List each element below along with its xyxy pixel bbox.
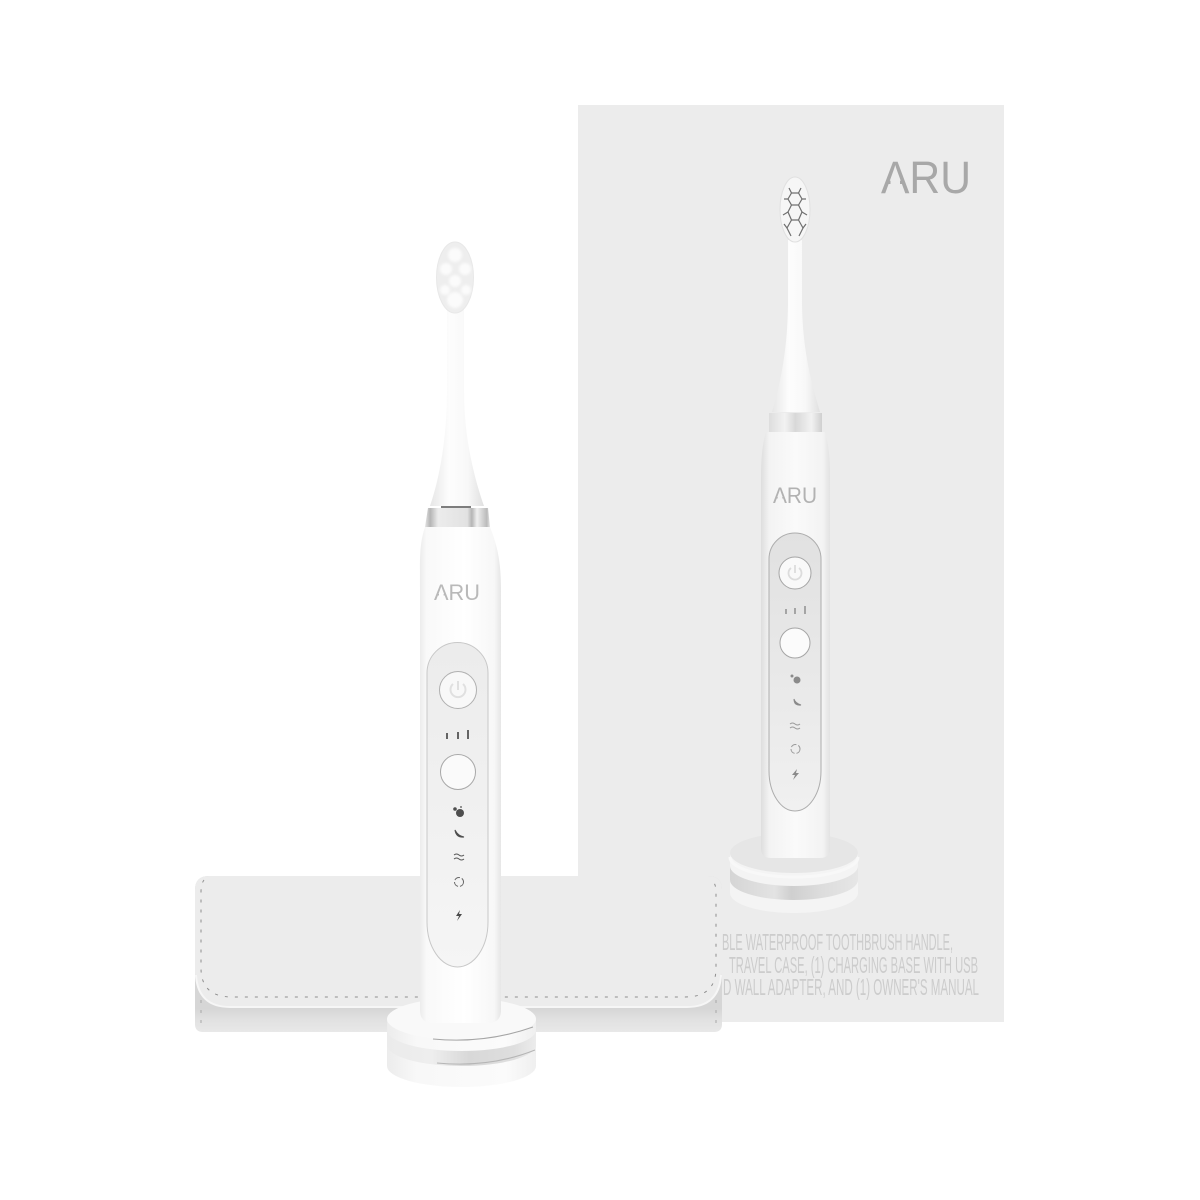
box collar xyxy=(769,413,822,432)
metal collar xyxy=(425,506,490,527)
box contents text xyxy=(722,929,979,1000)
brush neck xyxy=(430,305,484,506)
box base xyxy=(730,833,858,913)
power button xyxy=(440,672,476,708)
icon: leaf xyxy=(455,830,464,837)
battery indicator xyxy=(447,730,468,739)
charging base xyxy=(387,998,536,1087)
mode button xyxy=(440,754,476,790)
box logo: ARU xyxy=(881,152,971,203)
box brush head and neck xyxy=(772,177,820,412)
icon: refresh xyxy=(454,878,464,886)
box contents text: BLE WATERPROOF TOOTHBRUSH HANDLE, xyxy=(722,929,953,955)
metal band xyxy=(387,1030,536,1066)
case stitching xyxy=(201,880,716,997)
box illustration: toothbrush on base xyxy=(730,177,858,913)
control panel xyxy=(427,642,488,967)
travel case xyxy=(195,876,722,1032)
handle logo: ARU xyxy=(773,483,817,508)
case body xyxy=(195,876,722,1032)
icon: bubbles xyxy=(453,806,464,817)
toothbrush xyxy=(420,242,501,1023)
box handle xyxy=(761,432,830,858)
handle logo: ARU xyxy=(434,580,480,605)
panel: product box xyxy=(578,105,1004,1022)
case flap xyxy=(195,876,722,1007)
control panel xyxy=(769,533,821,811)
handle xyxy=(420,527,501,1023)
icon: charging bolt xyxy=(456,910,462,921)
brush head xyxy=(436,242,474,313)
icon: waves xyxy=(454,854,464,860)
